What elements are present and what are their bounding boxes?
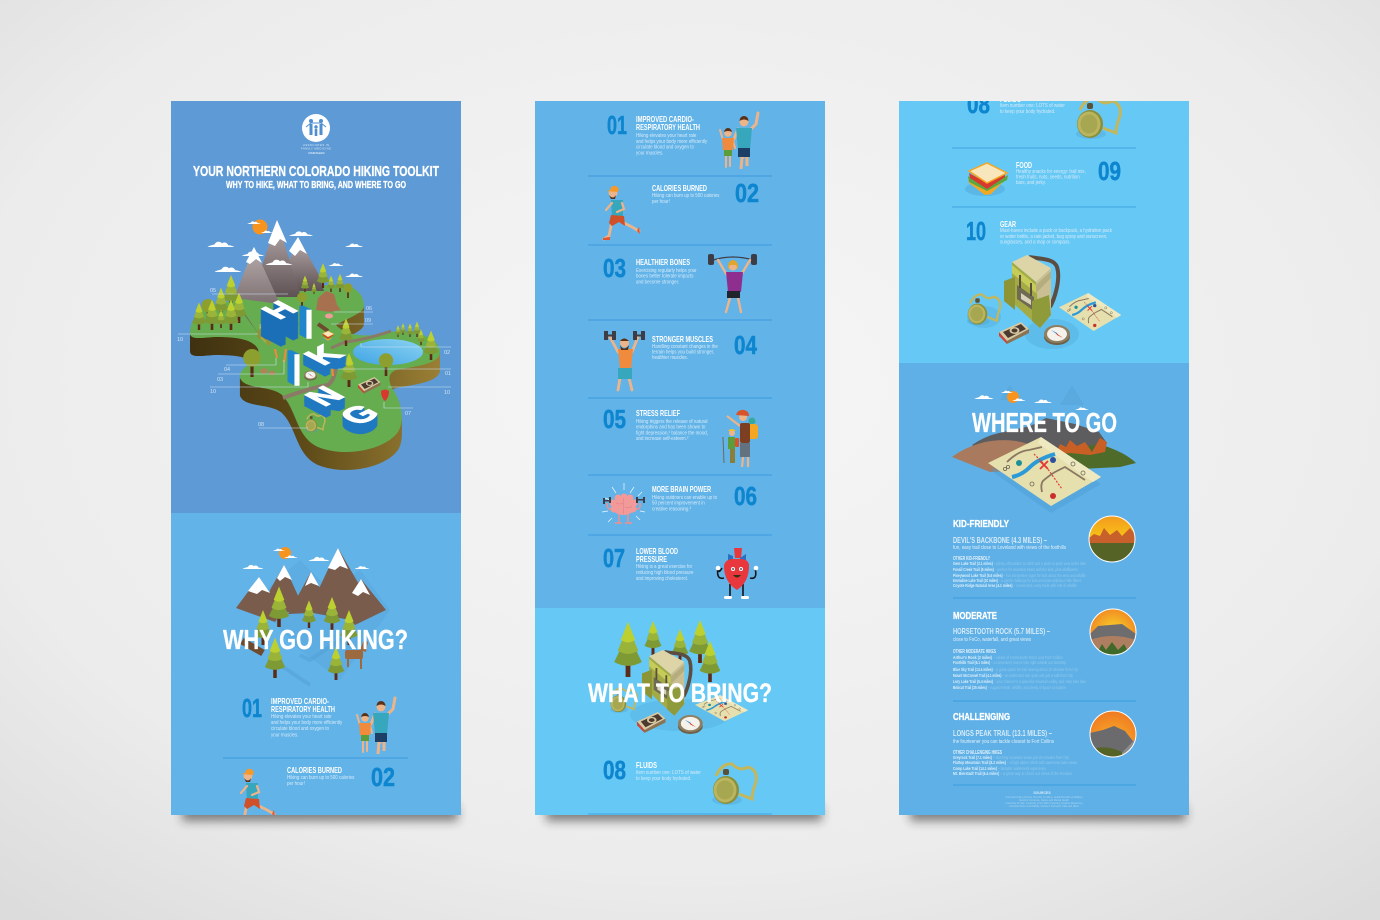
section: challenging — [953, 711, 1136, 776]
island top — [190, 285, 440, 452]
logo: WOMEN'S HEALTH — [308, 151, 325, 155]
benefit 03: and become stronger. — [636, 279, 679, 286]
benefit 07: reducing high blood pressure — [636, 570, 694, 576]
item 08 — [604, 760, 758, 805]
logo — [301, 114, 331, 155]
panel: benefits and what to bring — [535, 101, 825, 815]
item 08: 08 — [603, 755, 626, 785]
sources: SOURCES — [1033, 791, 1051, 795]
log — [318, 324, 328, 331]
item 10: GEAR — [1000, 219, 1016, 229]
sources: Colorado Parks and Wildlife, Northern Colorado Trails and Hikes — [1009, 804, 1080, 808]
benefit 04: STRONGER MUSCLES — [652, 334, 713, 344]
section: moderate: Mount McConnel Trail (4.1 miles) – an underused trail, quiet and just a walk from City — [953, 673, 1073, 678]
benefit 01: circulate blood and oxygen to — [271, 726, 329, 732]
letters: H — [253, 296, 305, 323]
sky: sun and clouds — [208, 220, 363, 277]
callout labels: 06 — [366, 306, 372, 312]
callout labels: 10 — [444, 390, 450, 396]
sources: Stanford University, Nature and Mental Health — [1019, 798, 1070, 802]
section: moderate: Lory Lake Trail (5.4 miles) – your chance to a peaceful mountain valley and crisp blue lake — [953, 679, 1086, 684]
callout labels: 10 — [210, 389, 216, 395]
logo: ASSOCIATES IN — [303, 143, 329, 147]
letters: G — [331, 400, 389, 430]
icon: parent and child hikers — [723, 410, 758, 467]
letters: N — [297, 382, 353, 411]
item 08 continued: to keep your body hydrated. — [1000, 109, 1055, 115]
benefit 01: IMPROVED CARDIO- — [636, 114, 694, 124]
benefit 07: LOWER BLOOD — [636, 546, 678, 556]
section: moderate: HORSETOOTH ROCK (5.7 MILES) – — [953, 626, 1050, 636]
section: challenging: Greyrock Trail (7.1 miles) – stunning mountain views just 30 minutes from City — [953, 755, 1069, 760]
benefit 06 — [602, 481, 757, 523]
item 08 continued: 08 — [967, 89, 990, 119]
item 08: Item number one: LOTS of water — [636, 770, 701, 776]
lake and trails — [283, 331, 423, 398]
benefit 02: 02 — [371, 762, 395, 792]
panel shadows — [182, 806, 1186, 821]
cloud over mountain — [266, 260, 292, 265]
section: challenging: LONGS PEAK TRAIL (13.1 MILES) – — [953, 728, 1052, 738]
benefit 06: 50 percent improvement in — [652, 500, 705, 507]
benefit 01: your muscles. — [636, 150, 663, 157]
benefit 07: PRESSURE — [636, 554, 667, 564]
section: kid-friendly: Emmaline Lake Trail (10 miles) – a gentle challenge for kids and more ambitious little hikers — [953, 578, 1081, 583]
benefit 05 — [603, 404, 758, 467]
section: moderate — [953, 609, 1136, 690]
benefit 02: per hour! — [652, 199, 670, 205]
item 09: fresh fruits, nuts, seeds, nutrition — [1016, 174, 1080, 181]
callout labels: 02 — [444, 350, 450, 356]
benefit 04: 04 — [734, 330, 757, 360]
benefit 05: 05 — [603, 404, 626, 434]
letters — [260, 300, 378, 434]
section: kid-friendly: Gem Lake Trail (3.1 miles) – plenty of boulders to climb and a peak-to-peak view at the lake — [953, 561, 1086, 566]
sources: University of Utah, Creativity in the Wild: Improving Creative Reasoning — [1006, 801, 1083, 805]
item 09: FOOD — [1016, 160, 1032, 170]
island illustration — [177, 220, 451, 470]
benefit 03 — [603, 253, 757, 312]
section: challenging: Comp Lake Trail (14.1 miles) – fantastic wilderness experience — [953, 766, 1046, 771]
benefit 01: Hiking elevates your heart rate — [271, 714, 332, 720]
benefit 02 — [603, 178, 759, 240]
panel: hero and why go hiking — [171, 101, 461, 823]
item 09 — [965, 156, 1121, 196]
trees — [192, 263, 438, 387]
section: moderate: MODERATE — [953, 611, 997, 622]
where to go illustration — [952, 385, 1136, 513]
letters: I — [293, 346, 301, 395]
sources: American Hiking Society, Benefits of Hiking, Health Benefits of Walking — [1006, 795, 1083, 799]
heading: why go hiking: WHY GO HIKING? — [223, 624, 408, 655]
section: kid-friendly: DEVIL'S BACKBONE (4.3 MILES) – — [953, 535, 1047, 545]
benefit 03: Exercising regularly helps your — [636, 268, 697, 274]
icon: brain with dumbbells — [602, 483, 645, 523]
benefit 04: Handling constant changes in the — [652, 344, 718, 350]
section: kid-friendly: Coyote Ridge Natural Area (4.1 miles) – convenient, easy trails with lots of wildlife — [953, 583, 1077, 588]
title: YOUR NORTHERN COLORADO HIKING TOOLKIT — [193, 163, 439, 180]
section: moderate: Arthur's Rock (3 miles) – views of Horsetooth Rock and Fort Collins — [953, 655, 1064, 660]
item 09: 09 — [1098, 156, 1121, 186]
section: challenging: Flattop Mountain Trail (8.2 miles) – a high alpine climb with awesome lake views — [953, 760, 1078, 765]
section: moderate: Bobcat Trail (25 miles) – rugged terrain, wildlife, and plenty of space to explore — [953, 685, 1066, 690]
section: moderate: Foothills Trail (6.1 miles) – a convenient, scenic hike right outside our doorstep — [953, 660, 1066, 665]
callout labels: 09 — [365, 318, 371, 324]
benefit 01: 01 — [242, 693, 262, 723]
item 08 continued: FLUIDS — [1000, 94, 1021, 104]
benefit 02: Hiking can burn up to 500 calories — [652, 193, 720, 199]
heading: where to go: WHERE TO GO — [972, 407, 1117, 438]
section: kid-friendly: Fossil Creek Trail (5 miles) – perfect for seasonal treats with the kids, plus wildflowers — [953, 567, 1078, 572]
item 08: FLUIDS — [636, 760, 657, 770]
benefit 05: and increase self-esteem.² — [636, 436, 689, 442]
item 08 continued — [967, 89, 1120, 139]
benefit 06: creative reasoning.³ — [652, 506, 691, 513]
benefit 02: Hiking can burn up to 500 calories — [287, 775, 355, 781]
section: moderate: OTHER MODERATE HIKES — [953, 649, 996, 655]
callout labels: 08 — [258, 422, 264, 428]
callout labels: 05 — [210, 288, 216, 294]
item 10: Must-haves include a pack or backpack, a hydration pack — [1000, 228, 1113, 234]
badge: devil's backbone — [1089, 516, 1135, 563]
benefit 03: HEALTHIER BONES — [636, 257, 690, 267]
section: challenging: Mt. Bierstadt Trail (6.4 miles) – a great way to check out views of the Rockies — [953, 771, 1073, 776]
icon: heart character — [716, 548, 758, 599]
benefit 02 — [240, 767, 394, 815]
benefit 07: and improving cholesterol. — [636, 576, 688, 582]
section: challenging: the fourteener you can tackle closest to Fort Collins — [953, 739, 1054, 745]
benefit 06: MORE BRAIN POWER — [652, 484, 711, 494]
section: kid-friendly: OTHER KID-FRIENDLY — [953, 556, 990, 562]
sources — [1006, 791, 1083, 808]
item 09: bars, and jerky. — [1016, 180, 1046, 186]
benefit 03: bones better tolerate impacts — [636, 273, 694, 280]
benefit 03: 03 — [603, 253, 626, 283]
benefit 05: endorphins and has been shown to — [636, 424, 706, 431]
badge: horsetooth rock — [1090, 609, 1136, 655]
section: kid-friendly: Pineywood Lake Trail (5.5 miles) – fun interpretive signs for kids about the area and wildlife — [953, 573, 1086, 578]
item 08 continued: Item number one: LOTS of water — [1000, 103, 1065, 109]
item 10: or water bottle, a rain jacket, bug spray and sunscreen, — [1000, 233, 1107, 240]
benefit 07: 07 — [603, 543, 625, 573]
deer — [345, 640, 368, 669]
callout labels: 03 — [217, 377, 223, 383]
benefit 02: CALORIES BURNED — [287, 765, 342, 775]
what to bring illustration — [610, 620, 748, 734]
item 09: Healthy snacks for energy: trail mix, — [1016, 169, 1086, 175]
section: kid-friendly — [953, 516, 1135, 588]
badge: longs peak — [1090, 711, 1136, 757]
benefit 02: CALORIES BURNED — [652, 183, 707, 193]
section: challenging: OTHER CHALLENGING HIKES — [953, 750, 1002, 756]
benefit 06: Hiking outdoors can enable up to — [652, 495, 717, 501]
item 08: to keep your body hydrated. — [636, 776, 691, 782]
benefit 04 — [604, 330, 757, 390]
benefit 01: circulate blood and oxygen to — [636, 144, 694, 151]
benefit 01: RESPIRATORY HEALTH — [271, 704, 335, 714]
benefit 01: IMPROVED CARDIO- — [271, 696, 329, 706]
callout labels: 04 — [224, 367, 230, 373]
section: challenging: CHALLENGING — [953, 712, 1010, 723]
benefit 01 — [607, 110, 758, 169]
subtitle: WHY TO HIKE, WHAT TO BRING, AND WHERE TO GO — [226, 179, 406, 191]
heading: what to bring: WHAT TO BRING? — [588, 678, 772, 708]
benefit 04: healthier muscles. — [652, 355, 688, 361]
mountain scene: why go hiking — [236, 547, 390, 685]
benefit 01: 01 — [607, 110, 627, 140]
benefit 02: per hour! — [287, 781, 305, 787]
icon: woman lifting barbell — [708, 254, 757, 312]
letters: K — [296, 341, 352, 370]
letters: I — [305, 303, 313, 347]
benefit 01: Hiking elevates your heart rate — [636, 133, 697, 139]
benefit 02: 02 — [735, 178, 759, 208]
benefit 01 — [242, 693, 395, 754]
mountains — [234, 220, 324, 334]
island base — [190, 306, 440, 470]
item 10: sunglasses, and a map or compass. — [1000, 239, 1071, 246]
benefit 01: your muscles. — [271, 732, 298, 738]
benefit 05: fight depression,¹ balance the mood, — [636, 430, 708, 437]
item 10: 10 — [966, 216, 986, 246]
section: moderate: close to FoCo, waterfall, and great views — [953, 637, 1031, 643]
benefit 01: and helps your body more efficiently — [636, 139, 708, 145]
callout labels: 10 — [177, 337, 183, 343]
benefit 07: Hiking is a great exercise for — [636, 564, 693, 570]
gear illustration — [967, 255, 1121, 349]
callout labels — [177, 288, 451, 428]
benefit 05: STRESS RELIEF — [636, 408, 680, 418]
benefit 05: Hiking triggers the release of natural — [636, 419, 708, 425]
benefit 01: and helps your body more efficiently — [271, 720, 343, 726]
mini icons — [257, 314, 389, 432]
callout labels: 01 — [445, 371, 451, 377]
logo: FAMILY MEDICINE — [301, 146, 331, 150]
rock formation — [316, 291, 341, 312]
benefit 06: 06 — [734, 481, 757, 511]
benefit 04: terrain helps you build stronger, — [652, 349, 714, 356]
item 10 — [966, 216, 1113, 246]
boulders — [260, 368, 275, 375]
callout labels: 07 — [405, 411, 411, 417]
benefit 01: RESPIRATORY HEALTH — [636, 122, 700, 132]
benefit 07 — [603, 543, 758, 599]
section: kid-friendly: KID-FRIENDLY — [953, 519, 1009, 530]
section: kid-friendly: fun, easy trail close to Loveland with views of the foothills — [953, 545, 1066, 551]
icon: man lifting dumbbells — [604, 331, 645, 390]
panel: what to bring and where to go — [899, 89, 1189, 815]
section: moderate: Blue Sky Trail (13.4 miles) – a great option for trail running about 10 minutes from City — [953, 667, 1078, 672]
